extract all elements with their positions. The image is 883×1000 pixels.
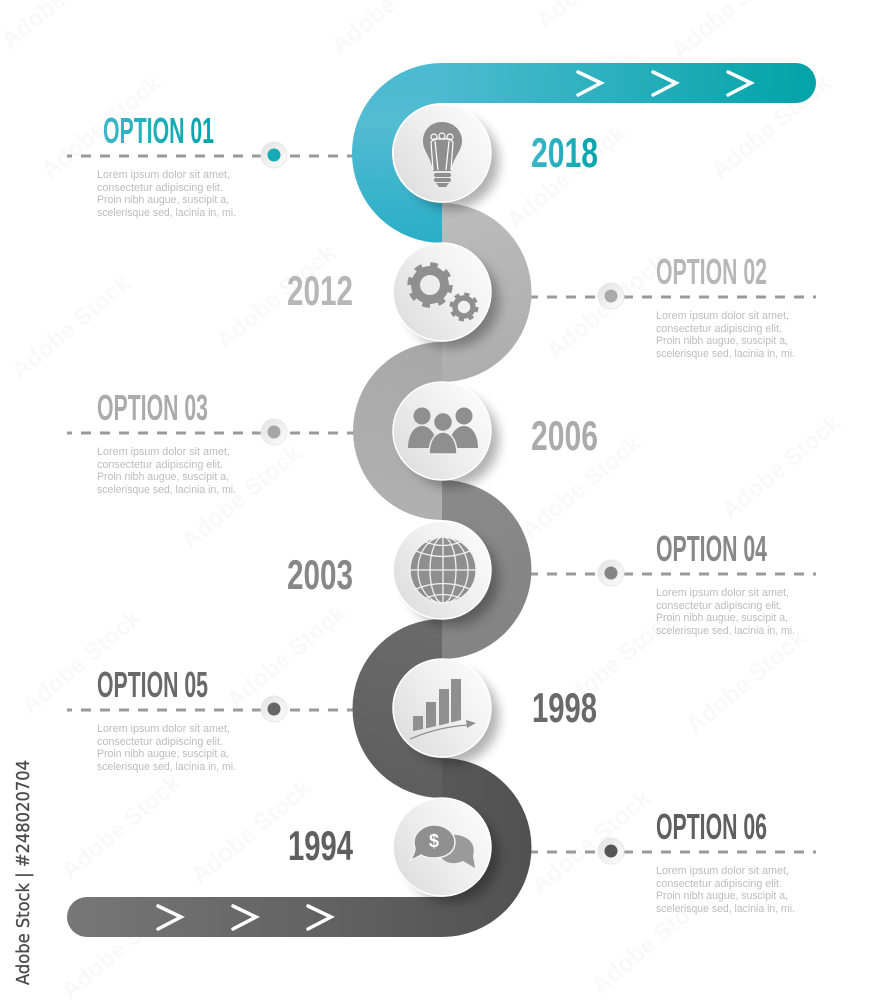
text block: option 02: scelerisque sed, lacinia in, mi. (656, 348, 795, 360)
road segment 5 (373, 639, 442, 778)
dashed connector lines (67, 156, 816, 852)
text block: option 04: Proin nibh augue, suscipit a, (656, 612, 788, 624)
text block: option 05: Lorem ipsum dolor sit amet, (97, 723, 230, 735)
watermark pattern: Adobe Stock (177, 439, 307, 555)
road segment 2 (442, 223, 512, 362)
road segment 1 band (441, 63, 816, 103)
text block: option 04 (656, 528, 795, 637)
year 1998: 1998 (532, 684, 597, 731)
text block: option 02: OPTION 02 (656, 251, 767, 292)
road segment 3 (373, 362, 442, 500)
circle shadows (405, 115, 499, 903)
node: option 5 (261, 696, 287, 722)
road segment 6 band (67, 897, 443, 937)
year 2006: 2006 (531, 412, 598, 459)
watermark pattern: Adobe Stock (187, 774, 317, 890)
text block: option 04: scelerisque sed, lacinia in, mi. (656, 625, 795, 637)
circle badge 3 (393, 382, 491, 480)
stock credit: Adobe Stock | #248020704 (14, 760, 34, 985)
text block: option 06: Lorem ipsum dolor sit amet, (656, 865, 789, 877)
road segment 1 arc (372, 83, 442, 223)
watermark pattern: Adobe Stock (707, 69, 837, 185)
top arrows (578, 72, 751, 95)
watermark pattern: Adobe Stock (212, 239, 342, 355)
text block: option 03: scelerisque sed, lacinia in, mi. (97, 484, 236, 496)
text block: option 05: consectetur adipiscing elit. (97, 736, 223, 748)
text block: option 02: Lorem ipsum dolor sit amet, (656, 310, 789, 322)
circle badge 1 (393, 104, 491, 202)
year 2018: 2018 (531, 129, 598, 176)
text block: option 03: Proin nibh augue, suscipit a, (97, 471, 229, 483)
watermark pattern: Adobe Stock (542, 249, 672, 365)
winding road (67, 63, 816, 937)
watermark pattern: Adobe Stock (527, 784, 657, 900)
text block: option 03: Lorem ipsum dolor sit amet, (97, 446, 230, 458)
watermark pattern: Adobe Stock (517, 429, 647, 545)
icon: speech bubbles with dollar: $ (429, 831, 439, 851)
text block: option 05: OPTION 05 (97, 664, 208, 705)
watermark pattern: Adobe Stock (57, 769, 187, 885)
road segment 4 (442, 500, 511, 639)
text block: option 06: consectetur adipiscing elit. (656, 878, 782, 890)
year 2012: 2012 (287, 267, 353, 314)
watermark pattern: Adobe Stock (587, 884, 717, 1000)
icon: light bulb (423, 122, 462, 187)
icon: people (408, 408, 478, 454)
icon: gears (410, 265, 476, 320)
text block: option 06: OPTION 06 (656, 806, 767, 847)
text block: option 04: consectetur adipiscing elit. (656, 600, 782, 612)
text block: option 01: OPTION 01 (103, 110, 214, 151)
circle badge 4 (393, 521, 491, 619)
text block: option 01: Proin nibh augue, suscipit a, (97, 194, 229, 206)
node: option 6 (598, 838, 624, 864)
node: option 1 (261, 142, 287, 168)
watermark pattern: Adobe Stock (502, 119, 632, 235)
text block: option 01: consectetur adipiscing elit. (97, 182, 223, 194)
bottom arrows (158, 906, 331, 929)
text block: option 04: OPTION 04 (656, 528, 767, 569)
year 2003: 2003 (287, 551, 353, 598)
text block: option 01: scelerisque sed, lacinia in, mi. (97, 207, 236, 219)
circle badge 2 (393, 243, 491, 341)
text block: option 05: Proin nibh augue, suscipit a, (97, 748, 229, 760)
text block: option 02 (656, 251, 795, 360)
watermark pattern: Adobe Stock (222, 599, 352, 715)
text block: option 05: scelerisque sed, lacinia in, mi. (97, 761, 236, 773)
watermark pattern: Adobe Stock (552, 604, 682, 720)
text block: option 01 (97, 110, 236, 219)
year 1994: 1994 (288, 822, 353, 869)
road segment 6 arc (442, 778, 512, 917)
icon: bar chart with arrow (410, 679, 476, 739)
node: option 4 (598, 560, 624, 586)
text block: option 02: Proin nibh augue, suscipit a, (656, 335, 788, 347)
text block: option 02: consectetur adipiscing elit. (656, 323, 782, 335)
text block: option 06: Proin nibh augue, suscipit a, (656, 890, 788, 902)
watermark pattern: Adobe Stock (717, 409, 847, 525)
text block: option 03: OPTION 03 (97, 387, 208, 428)
watermark pattern: Adobe Stock (37, 69, 167, 185)
watermark pattern: Adobe Stock (682, 624, 812, 740)
node: option 3 (261, 419, 287, 445)
watermark pattern: Adobe Stock (7, 269, 137, 385)
node: option 2 (598, 283, 624, 309)
text block: option 03 (97, 387, 236, 496)
icon: globe (410, 537, 476, 603)
text block: option 05 (97, 664, 236, 773)
text block: option 06 (656, 806, 795, 915)
circle badge 6 (393, 798, 491, 896)
text block: option 03: consectetur adipiscing elit. (97, 459, 223, 471)
circle badge 5 (393, 659, 491, 757)
text block: option 01: Lorem ipsum dolor sit amet, (97, 169, 230, 181)
text block: option 06: scelerisque sed, lacinia in, mi. (656, 903, 795, 915)
text block: option 04: Lorem ipsum dolor sit amet, (656, 587, 789, 599)
watermark pattern: Adobe Stock (17, 604, 147, 720)
